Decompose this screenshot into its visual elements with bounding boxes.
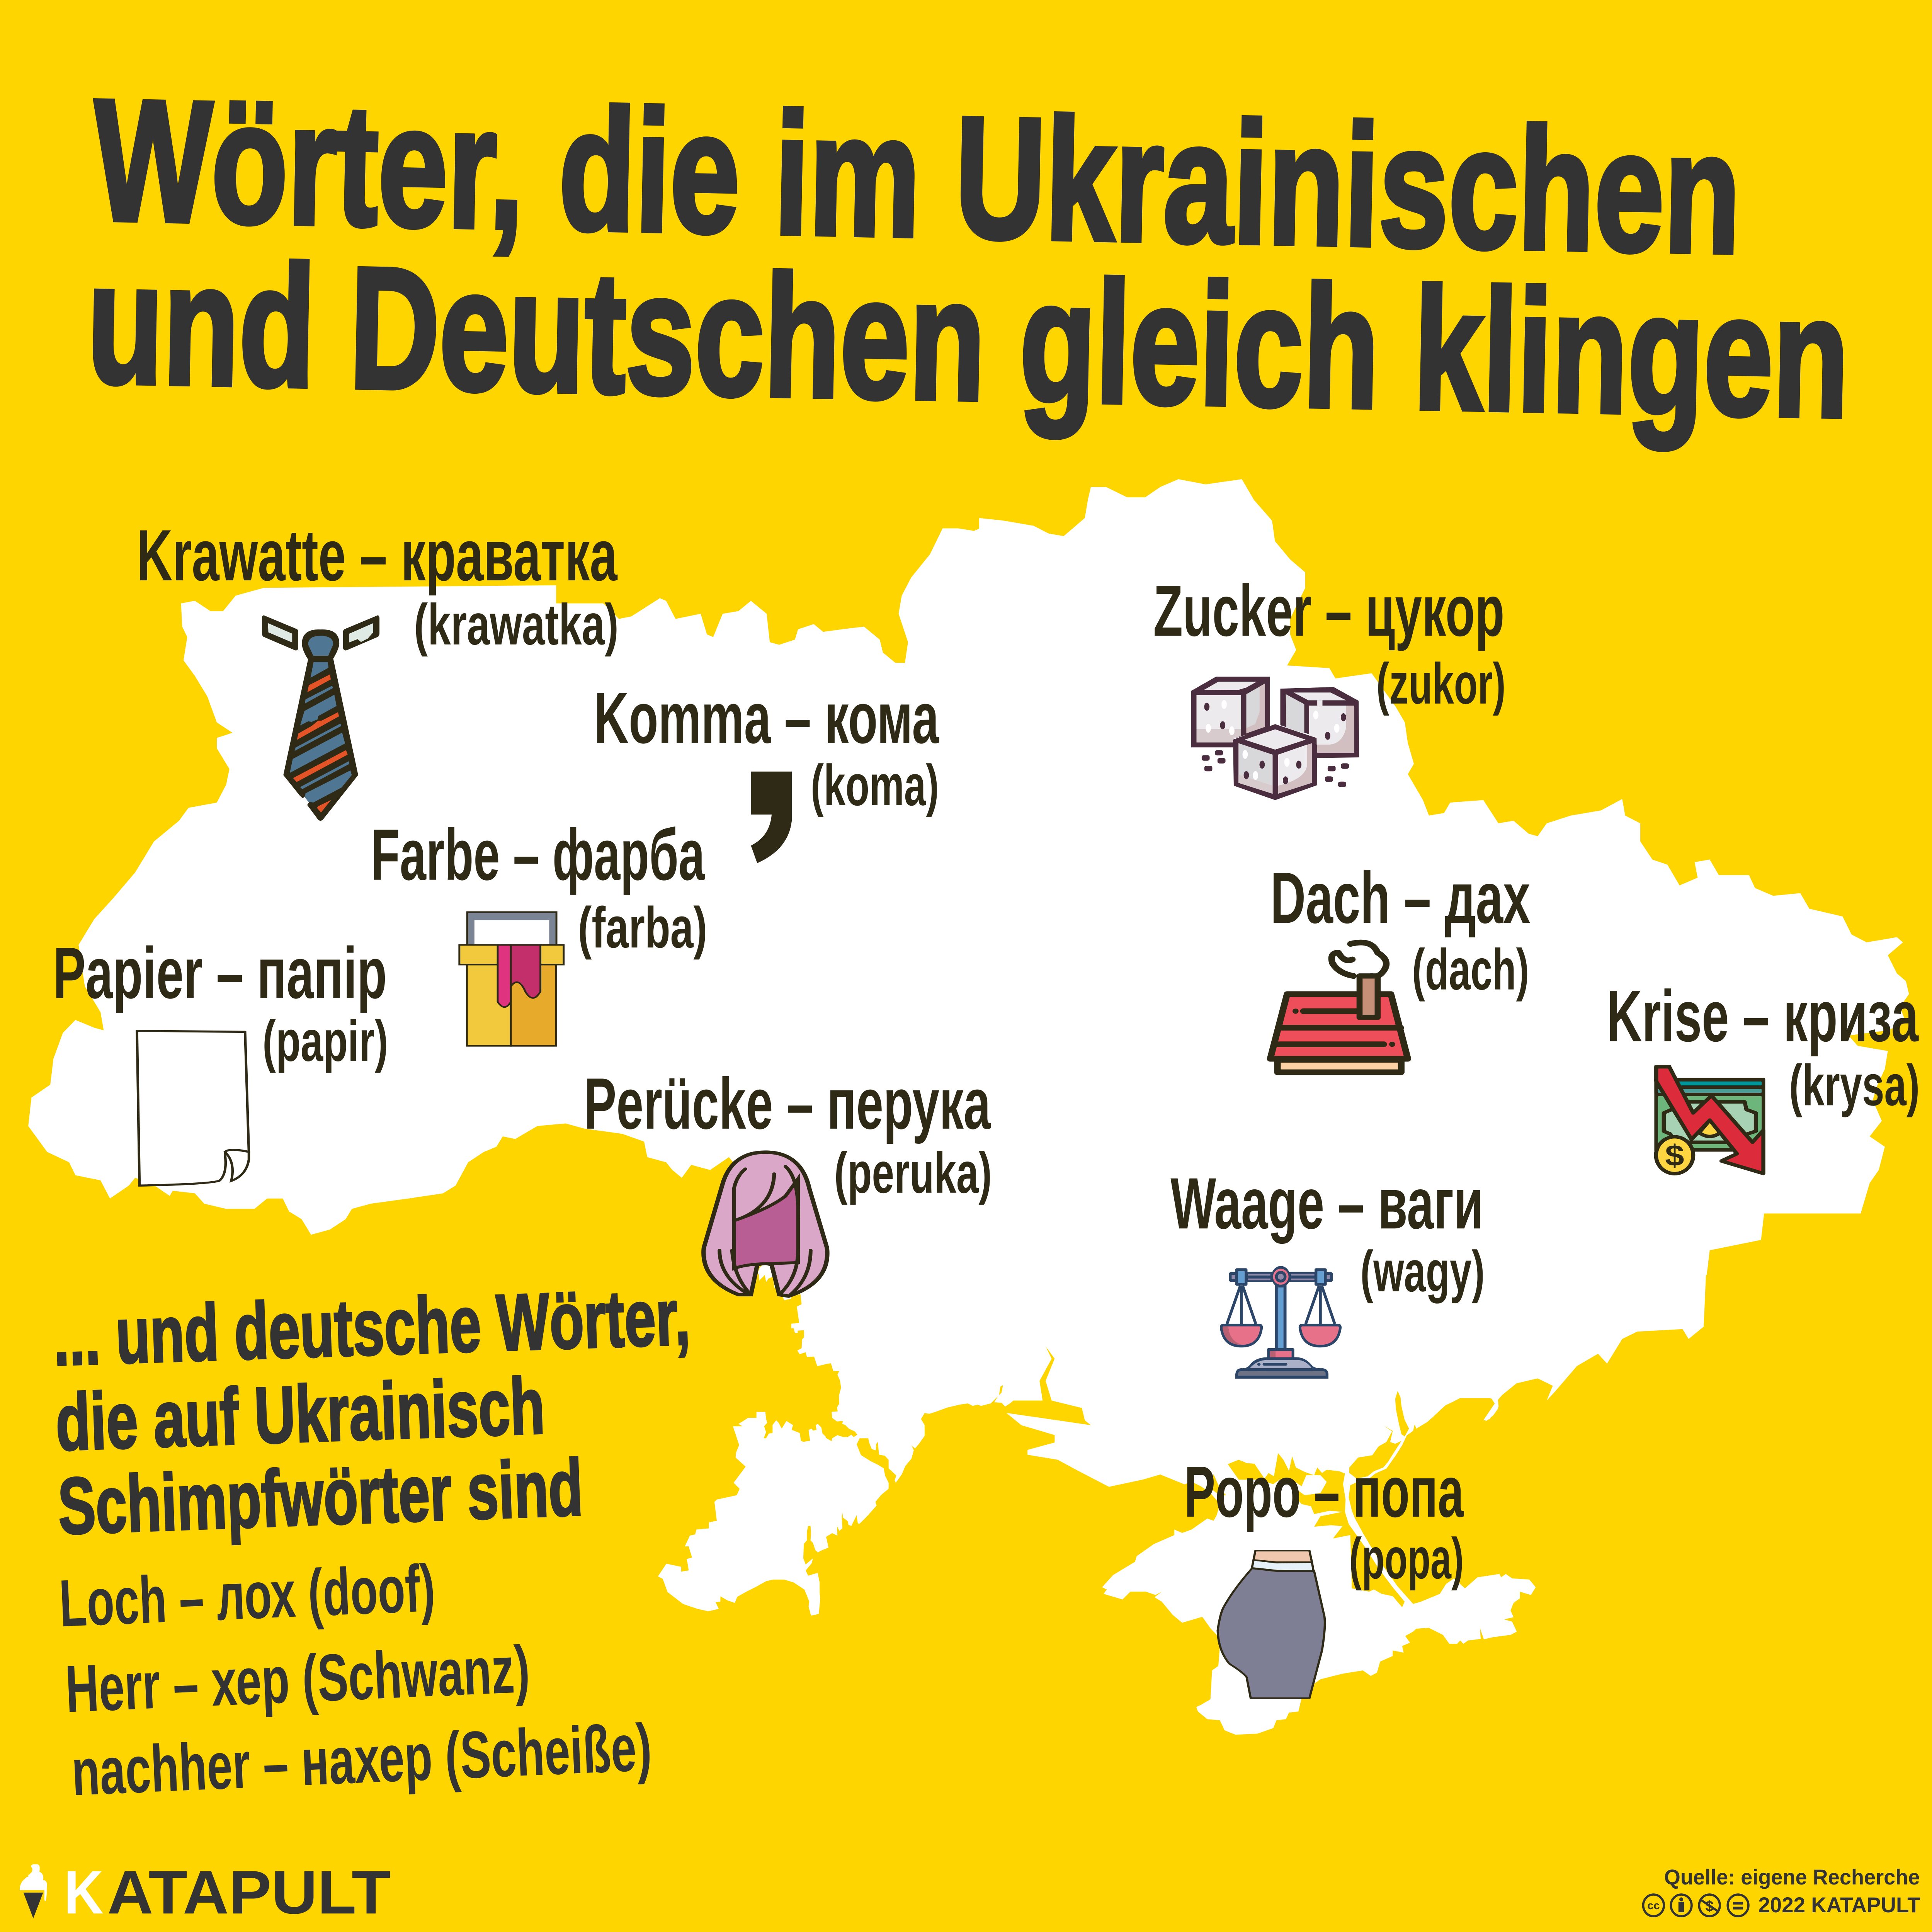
subheading: deutsche Wörter als Schimpfwörter: die auf Ukrainisch [54,1361,546,1467]
label: Perücke [584,1063,992,1205]
source and licence [1643,1865,1920,1917]
label: Perücke: Perücke – перука [584,1063,991,1144]
subheading: deutsche Wörter als Schimpfwörter: Schimpfwörter sind [56,1442,584,1551]
label: Dach: (dach) [1412,937,1529,1002]
label: Komma: Komma – кома [594,677,939,759]
label: Waage: Waage – ваги [1170,1163,1483,1244]
label: Papier: Papier – папір [53,932,387,1014]
icon: comma [751,772,792,863]
icon: balance scale [1220,1266,1342,1379]
logo: KATAPULT: ATAPULT [107,1858,391,1927]
subheading: deutsche Wörter als Schimpfwörter: ... und deutsche Wörter, [52,1272,691,1382]
label: Dach: Dach – дах [1270,857,1530,938]
source and licence: cc [1647,1900,1660,1912]
label: Farbe: (farba) [578,895,707,960]
label: Dach [1270,857,1530,1002]
label: Zucker: Zucker – цукор [1153,570,1504,651]
icon: sugar cubes [1191,677,1359,800]
word list: Schimpfwörter: nachher – нахер (Scheiße) [70,1710,653,1810]
word list: Schimpfwörter: Loch – лох (doof) [58,1551,437,1641]
label: Farbe: Farbe – фарба [371,814,705,895]
icon: wig [704,1152,827,1296]
label: Papier [53,932,388,1073]
icon: sheet of paper [137,1031,249,1185]
label: Popo: (popa) [1349,1526,1464,1591]
icon: paint bucket [459,911,564,1046]
label: Popo [1184,1451,1464,1591]
label: Komma [594,677,939,818]
label: Krawatte: Krawatte – краватка [137,515,618,596]
label: Farbe [371,814,707,960]
label: Waage [1170,1163,1485,1304]
label: Krawatte [137,515,619,657]
label: Waage: (wagy) [1360,1239,1485,1304]
label: Komma: (koma) [811,753,939,818]
word list: Schimpfwörter [58,1551,653,1810]
label: Perücke: (peruka) [834,1140,992,1205]
subheading: deutsche Wörter als Schimpfwörter [52,1272,691,1551]
logo: KATAPULT: K [64,1858,104,1927]
word list: Schimpfwörter: Herr – хер (Schwanz) [64,1632,531,1726]
icon: banknote with falling arrow: $ [1665,1139,1684,1172]
source and licence: Quelle: eigene Recherche [1664,1865,1920,1889]
label: Zucker [1153,570,1506,716]
title [85,63,1851,454]
label: Krise [1607,976,1920,1117]
map of Ukraine [28,479,1909,1735]
label: Zucker: (zukor) [1376,651,1506,716]
source and licence: 2022 KATAPULT [1758,1893,1920,1917]
icon: necktie [262,616,379,821]
label: Papier: (papir) [262,1009,388,1073]
icon: banknote with falling arrow [1654,1065,1765,1173]
label: Popo: Popo – попа [1184,1451,1464,1532]
icon: buttocks in shorts [1218,1551,1325,1698]
icon: roof with chimney [1270,942,1408,1072]
label: Krawatte: (krawatka) [414,592,619,657]
source and licence: $ [1705,1898,1714,1915]
